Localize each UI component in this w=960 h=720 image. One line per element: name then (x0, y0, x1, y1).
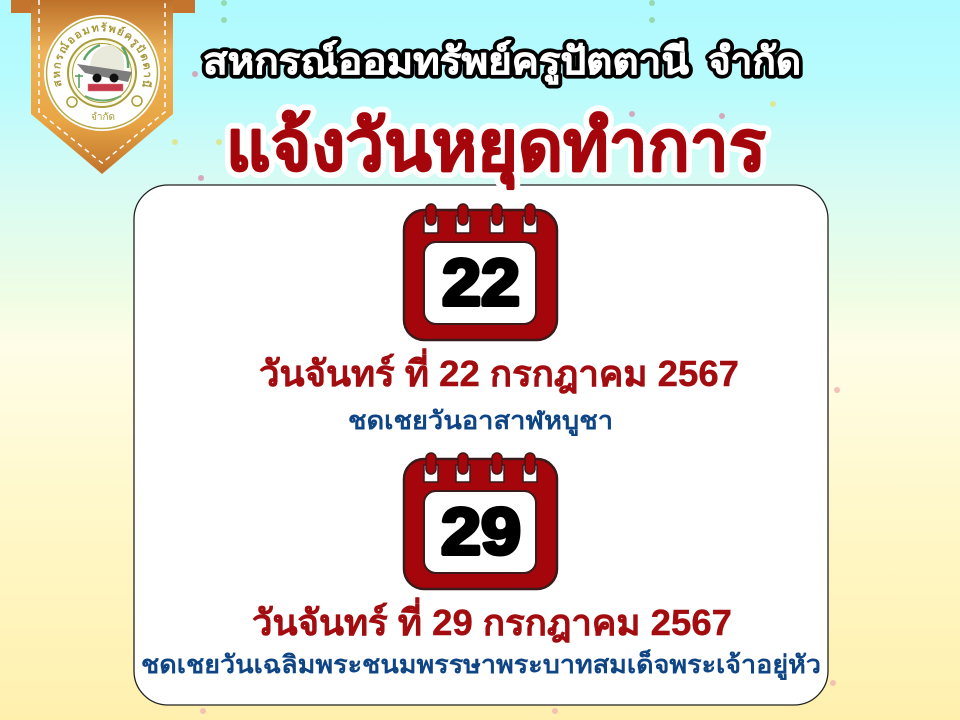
logo ribbon badge (11, 0, 195, 174)
note: substitute for Queen's birthday: ชดเชยวันเฉลิมพระชนมพรรษาพระบาทสมเด็จพระเจ้าอยู่หัว (141, 649, 821, 681)
calendar icon: 29: 29 (441, 494, 521, 568)
heading: cooperative name: จำกัด (708, 41, 801, 83)
white content panel (134, 185, 828, 705)
heading: holiday notice: แจ้งวันหยุดทำการ (226, 107, 766, 190)
note: substitute for Asanha Bucha: ชดเชยวันอาสาฬหบูชา (348, 407, 613, 437)
cooperative seal: จำกัด (91, 112, 115, 123)
cooperative seal: สหกรณ์ออมทรัพย์ครูปัตตานี (54, 22, 152, 88)
heading: holiday notice: แจ้งวันหยุดทำการ (226, 107, 766, 190)
heading: cooperative name: สหกรณ์ออมทรัพย์ครูปัตตานี (203, 40, 689, 85)
cooperative seal (44, 15, 160, 131)
date line: 29 July 2567: วันจันทร์ ที่ 29 กรกฎาคม 2567 (252, 597, 732, 643)
calendar icon: 29 (404, 453, 557, 589)
heading: cooperative name: จำกัด (708, 41, 801, 83)
heading: cooperative name: สหกรณ์ออมทรัพย์ครูปัตตานี (203, 40, 689, 85)
date line: 22 July 2567: วันจันทร์ ที่ 22 กรกฎาคม 2567 (259, 348, 739, 394)
calendar icon: 22 (404, 204, 557, 340)
calendar icon: 22: 22 (442, 245, 520, 319)
